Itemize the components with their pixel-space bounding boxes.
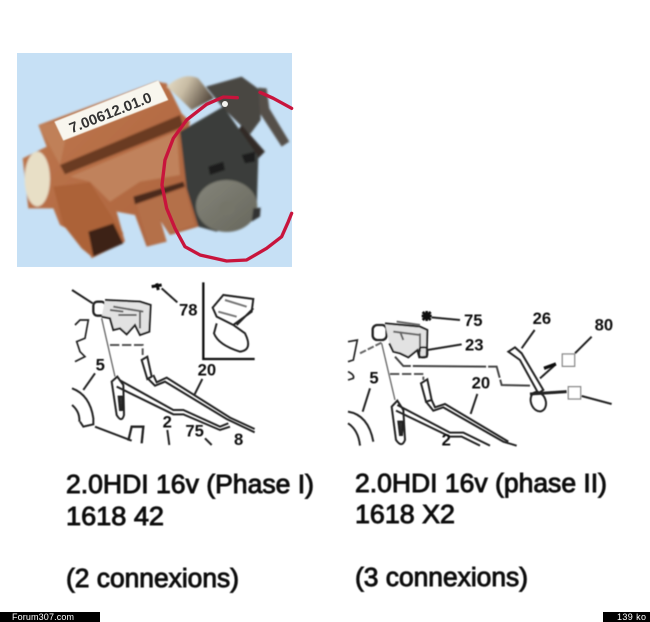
small bracket bbox=[75, 320, 88, 362]
number labels: 2 bbox=[442, 431, 451, 450]
caption: phase II: 2.0HDI 16v (phase II) bbox=[355, 470, 607, 498]
valve drawing bbox=[72, 290, 151, 335]
number labels bbox=[96, 301, 243, 449]
caption: phase II: 1618 X2 bbox=[355, 501, 455, 529]
label: part number: 7.00612.01.0 bbox=[67, 90, 154, 137]
number labels: 75 bbox=[464, 311, 483, 330]
hose 20 bbox=[392, 379, 517, 446]
number labels: 5 bbox=[369, 368, 379, 387]
number labels: 26 bbox=[533, 309, 551, 328]
diagram: phase II bbox=[348, 309, 613, 450]
dashed hoses bbox=[102, 318, 115, 377]
vacuum routing line bbox=[395, 357, 530, 386]
hose 20 bbox=[112, 357, 255, 432]
footer: file size: 139 ko bbox=[617, 612, 646, 622]
inset clip drawing bbox=[203, 282, 255, 359]
number labels: 78 bbox=[179, 301, 198, 320]
caption: phase II: (3 connexions) bbox=[355, 564, 528, 592]
number labels: 5 bbox=[96, 355, 105, 374]
footer: site tag bbox=[0, 612, 100, 622]
footer: site tag: Forum307.com bbox=[12, 612, 74, 622]
leader lines bbox=[83, 288, 212, 445]
footer: file size bbox=[603, 612, 650, 622]
number labels: 20 bbox=[198, 361, 216, 380]
number labels: 2 bbox=[163, 413, 172, 432]
hose 26 and clamp bbox=[508, 347, 567, 414]
valve drawing bbox=[373, 322, 427, 357]
icon: star marker bbox=[152, 283, 162, 290]
small bracket bbox=[348, 340, 357, 380]
leader lines bbox=[363, 317, 592, 414]
hose at bottom left bbox=[348, 412, 373, 446]
caption: phase I: (2 connexions) bbox=[66, 565, 239, 593]
connector squares bbox=[562, 354, 581, 399]
caption: phase I bbox=[66, 471, 314, 593]
dashed hoses bbox=[382, 343, 395, 400]
number labels: 23 bbox=[465, 336, 484, 355]
red hand-drawn circle bbox=[162, 92, 292, 261]
number labels: 8 bbox=[234, 430, 243, 449]
caption: phase II bbox=[355, 470, 607, 592]
number labels bbox=[369, 309, 613, 450]
caption: phase I: 1618 42 bbox=[66, 503, 164, 531]
diagram: phase I bbox=[72, 282, 255, 449]
photo background bbox=[17, 53, 292, 267]
number labels: 20 bbox=[472, 373, 490, 392]
photo: pressure solenoid valve bbox=[17, 53, 292, 267]
valve body bbox=[23, 76, 289, 258]
caption: phase I: 2.0HDI 16v (Phase I) bbox=[66, 471, 314, 499]
icon: star marker bbox=[422, 311, 432, 321]
label: part number bbox=[54, 80, 168, 141]
small part bbox=[128, 427, 143, 443]
hose at bottom left bbox=[72, 388, 132, 441]
number labels: 80 bbox=[595, 316, 613, 335]
number labels: 75 bbox=[185, 422, 204, 441]
